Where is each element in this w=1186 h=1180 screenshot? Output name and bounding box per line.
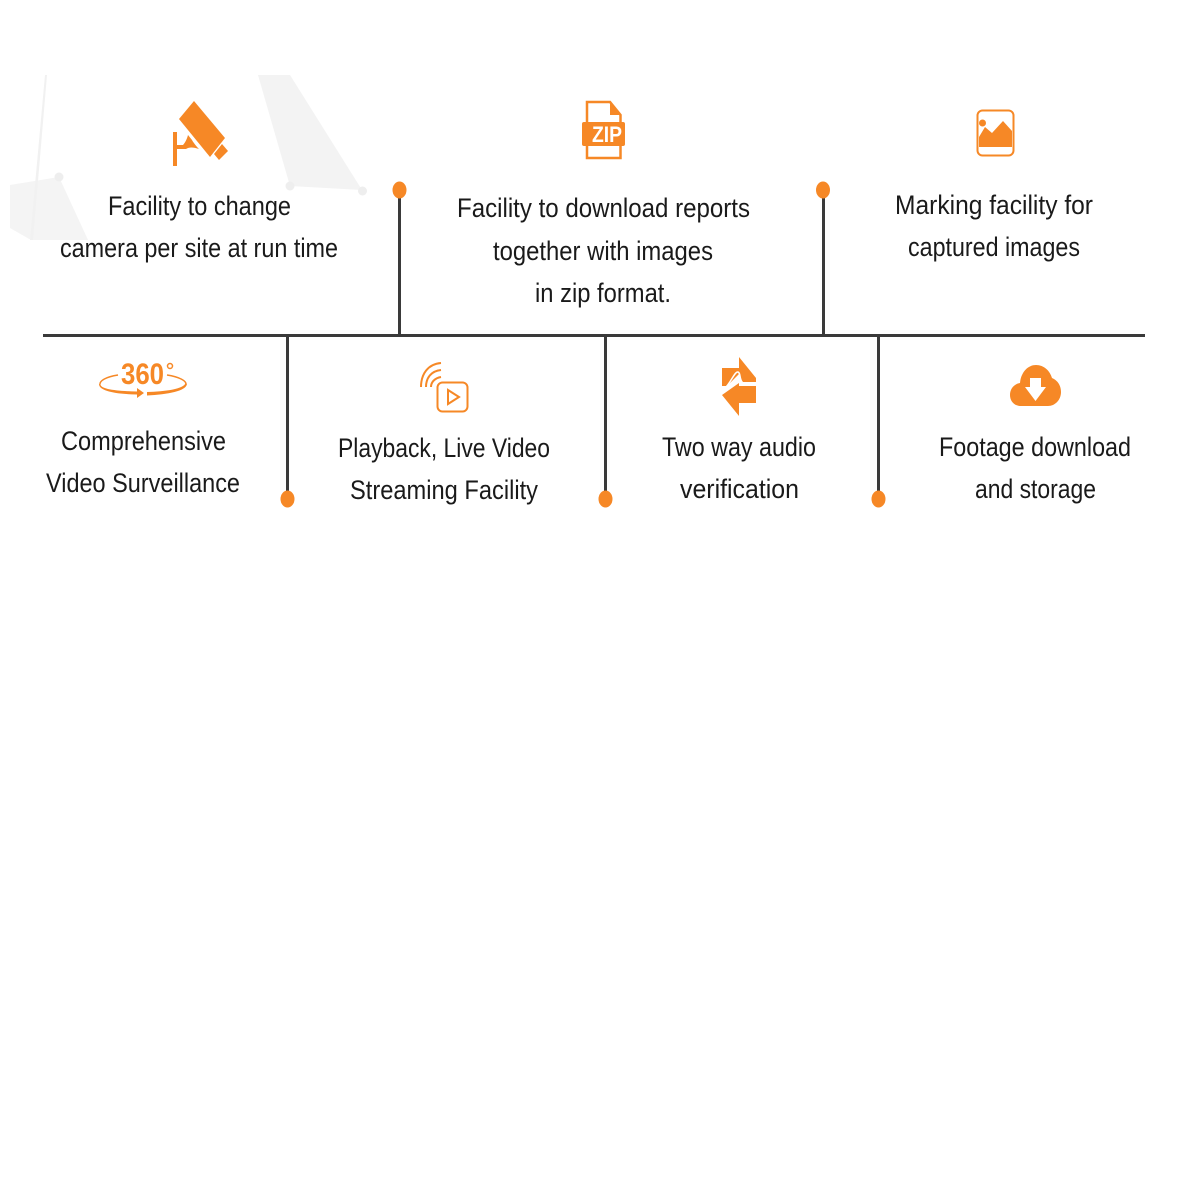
text: footage download: and storage xyxy=(975,474,1096,504)
text: download reports: Facility to download reports xyxy=(457,193,750,223)
text: change camera: camera per site at run time xyxy=(60,233,338,263)
icon: two way arrows xyxy=(722,357,756,416)
connector: 360 surveillance xyxy=(280,336,294,508)
connector: two way audio xyxy=(872,336,886,508)
text: playback: Playback, Live Video xyxy=(338,433,550,463)
text: comprehensive surveillance xyxy=(46,426,240,498)
text: download reports: together with images xyxy=(493,236,713,266)
text: playback xyxy=(338,433,550,505)
text: comprehensive surveillance: Comprehensive xyxy=(61,426,226,456)
text: comprehensive surveillance: Video Surveillance xyxy=(46,468,240,498)
text: playback: Streaming Facility xyxy=(350,475,538,505)
text: two way audio xyxy=(662,432,816,504)
text: footage download xyxy=(939,432,1131,504)
connector: marking facility xyxy=(816,182,830,335)
text: two way audio: Two way audio xyxy=(662,432,816,462)
text: marking facility: captured images xyxy=(908,232,1080,262)
connector: zip download xyxy=(392,182,406,335)
icon: image xyxy=(978,110,1014,156)
text: marking facility: Marking facility for xyxy=(895,190,1093,220)
icon: zip file: ZIP xyxy=(592,122,622,147)
background: faint camera watermark xyxy=(10,75,367,240)
text: footage download: Footage download xyxy=(939,432,1131,462)
connector: playback xyxy=(598,336,612,508)
icon: 360 degrees: 360 xyxy=(121,358,164,391)
text: marking facility xyxy=(895,190,1093,262)
text: change camera xyxy=(60,191,338,263)
timeline axis xyxy=(43,334,1145,337)
text: download reports xyxy=(457,193,750,308)
icon: zip file xyxy=(582,102,625,158)
text: two way audio: verification xyxy=(680,474,799,504)
icon: cloud download xyxy=(1010,365,1061,406)
icon: 360 degrees xyxy=(99,358,187,398)
text: change camera: Facility to change xyxy=(108,191,291,221)
icon: security camera xyxy=(173,101,228,166)
icon: wireless playback xyxy=(421,363,468,412)
text: download reports: in zip format. xyxy=(535,278,671,308)
